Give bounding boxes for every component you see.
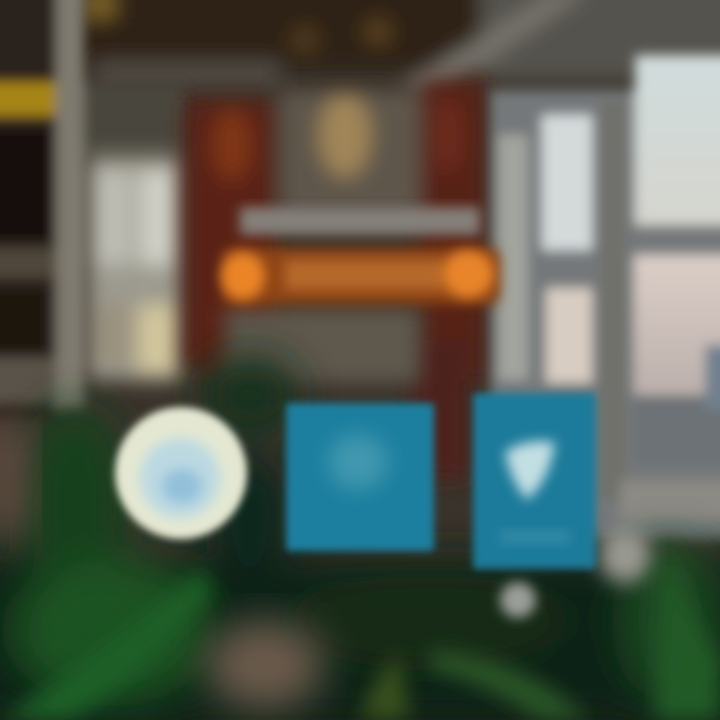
circular white sign	[115, 407, 247, 539]
orange sign	[221, 248, 500, 304]
icon: heart shape	[505, 441, 555, 500]
white vase on the right	[599, 527, 651, 583]
floor base	[0, 650, 720, 720]
icon: blurred symbol	[162, 469, 202, 503]
left shelving wall	[0, 0, 185, 420]
tan wall at far left	[0, 420, 28, 530]
central wood panels	[185, 80, 485, 480]
foreground leaves	[0, 540, 720, 720]
icon: blurred symbol	[328, 434, 388, 490]
pot at bottom	[205, 620, 325, 710]
blue square sign	[286, 403, 434, 551]
right window frame	[490, 55, 720, 540]
blue tall sign	[473, 393, 596, 569]
left window	[88, 155, 183, 380]
lower centre wall	[225, 308, 420, 383]
caption bar	[500, 530, 570, 544]
plants	[0, 355, 720, 720]
ceiling	[0, 0, 720, 100]
stone band above sign	[240, 207, 480, 235]
